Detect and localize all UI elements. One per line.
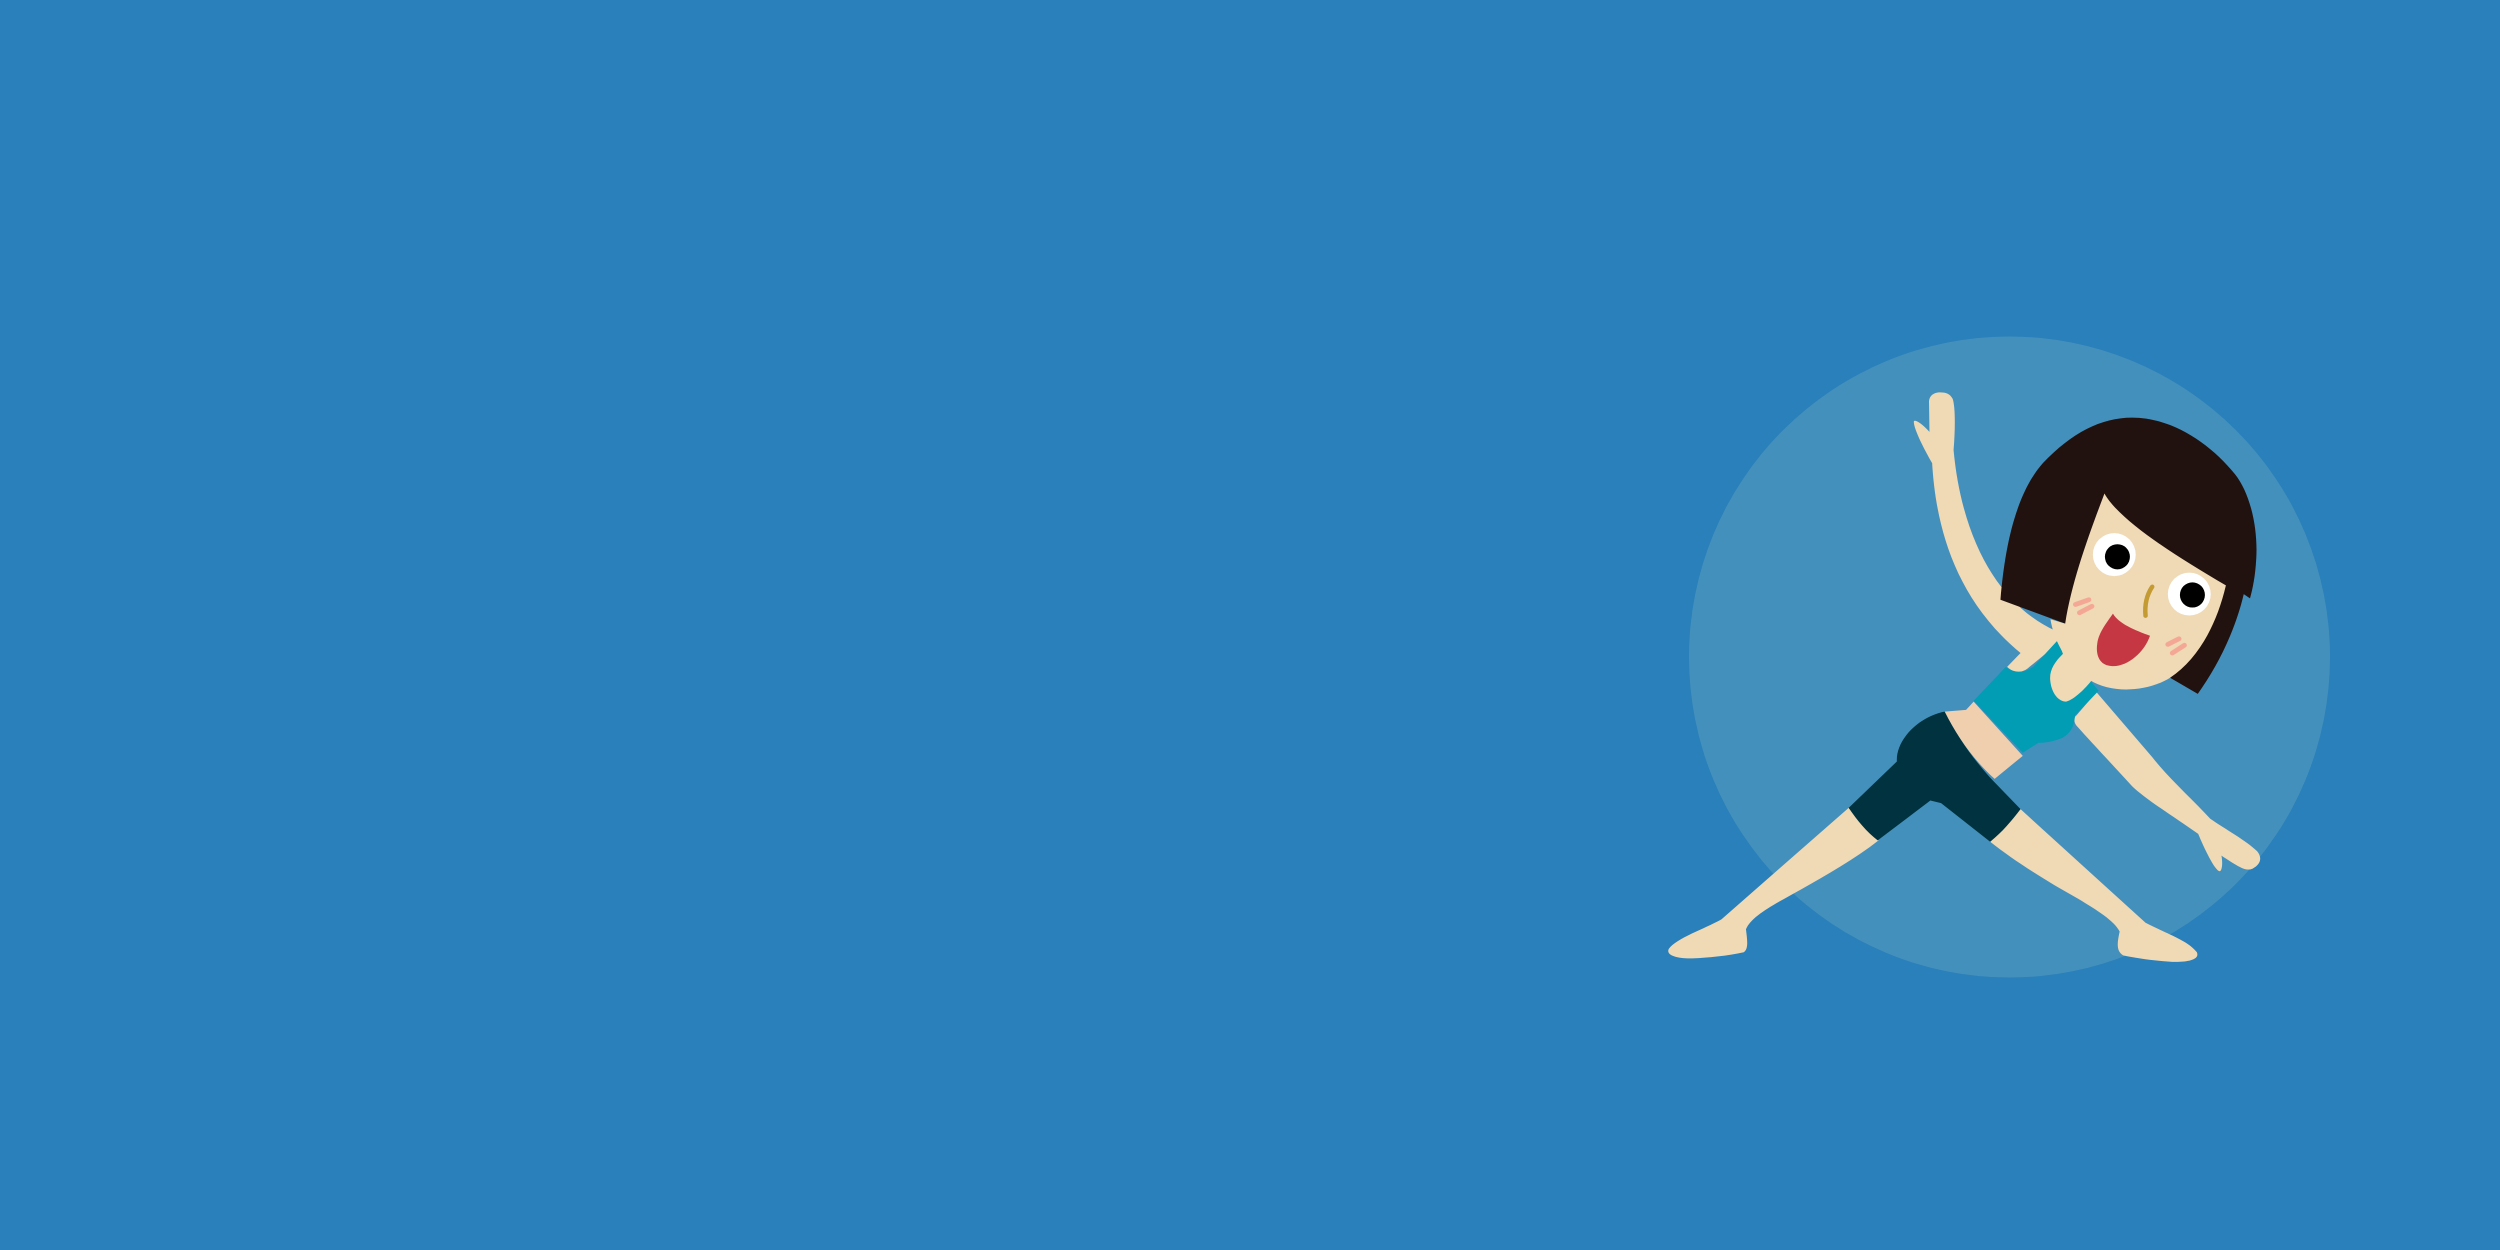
character: woman in side stretch pose [1668, 392, 2260, 962]
background circle [1689, 336, 2330, 978]
right leg [1990, 809, 2197, 962]
teal tank top [1974, 641, 2099, 753]
right eye [2168, 573, 2211, 616]
raised arm [1914, 392, 2058, 672]
open mouth [2097, 614, 2150, 666]
lower arm [2074, 692, 2260, 871]
neck [2050, 624, 2096, 702]
face [2050, 493, 2226, 689]
left cheek blush [2075, 600, 2092, 613]
right cheek blush [2168, 639, 2184, 653]
nose [2145, 587, 2152, 616]
left eye [2093, 533, 2136, 576]
hair [2000, 418, 2257, 694]
midriff [1945, 702, 2023, 779]
left leg [1668, 808, 1879, 958]
shorts [1849, 712, 2021, 842]
